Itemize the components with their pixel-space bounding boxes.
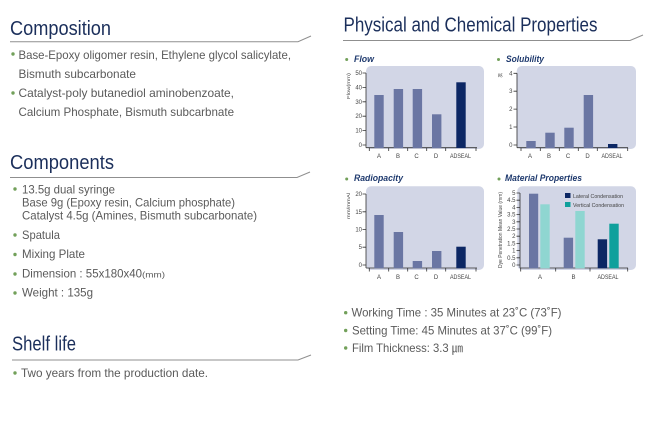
working, setting and film properties: Working Time : 35 Minutes at 23˚C (73˚F) — [352, 306, 562, 320]
chart: radiopacity: ADSEAL — [450, 275, 472, 281]
composition list: Calcium Phosphate, Bismuth subcarbnate — [18, 105, 234, 119]
chart: material properties: 0.5 — [507, 256, 516, 262]
components list: (mm) — [142, 270, 165, 279]
chart: material properties: A — [538, 275, 542, 281]
chart: flow: 30 — [355, 100, 363, 106]
chart: solubility — [497, 54, 636, 160]
components list: Mixing Plate — [22, 247, 85, 261]
legend — [565, 193, 624, 209]
chart: solubility: C — [566, 154, 571, 160]
chart: solubility: 3 — [509, 89, 513, 95]
chart: solubility: 1 — [509, 125, 513, 131]
chart: flow: 50 — [355, 71, 363, 77]
chart: material properties: 2.5 — [507, 227, 516, 233]
chart: radiopacity: mm/mmAl — [346, 193, 351, 219]
composition list: Base-Epoxy oligomer resin, Ethylene glycol salicylate, — [18, 48, 291, 62]
chart: flow: 0 — [359, 143, 363, 149]
chart: flow — [345, 54, 484, 160]
legend: Vertical Condensation — [573, 203, 624, 209]
chart: solubility: ADSEAL — [602, 154, 623, 160]
chart: solubility: ㎍ — [498, 72, 503, 79]
chart: flow: 40 — [355, 85, 363, 91]
panel: components — [10, 152, 310, 300]
chart: radiopacity: B — [396, 275, 400, 281]
chart: radiopacity — [345, 173, 484, 281]
chart: material properties: 4.5 — [507, 198, 516, 204]
working, setting and film properties: Film Thickness: 3.3 ㎛ — [352, 341, 463, 355]
chart: flow: 10 — [355, 129, 363, 135]
components list: 13.5g dual syringe — [22, 182, 115, 196]
heading: physical and chemical properties: Physical and Chemical Properties — [344, 15, 598, 37]
chart: flow: A — [377, 154, 381, 160]
chart: material properties: 2 — [512, 234, 516, 240]
chart: material properties: 1.5 — [507, 241, 516, 247]
chart: material properties: 1 — [512, 249, 516, 255]
chart: material properties — [498, 173, 636, 281]
chart: flow: ADSEAL — [450, 154, 472, 160]
components list: Spatula — [22, 228, 60, 242]
chart: flow: Flow(mm) — [346, 72, 351, 99]
chart: solubility: 2 — [509, 107, 513, 113]
chart: radiopacity: 5 — [359, 245, 363, 251]
heading: composition: Composition — [10, 18, 111, 40]
chart: material properties: 3 — [512, 220, 516, 226]
legend: Lateral Condensation — [573, 194, 623, 200]
heading: components: Components — [10, 152, 114, 174]
chart: radiopacity: 20 — [355, 192, 363, 198]
chart: radiopacity: 10 — [355, 228, 363, 234]
working, setting and film properties: Setting Time: 45 Minutes at 37˚C (99˚F) — [352, 324, 552, 338]
components list: Catalyst 4.5g (Amines, Bismuth subcarbonate) — [22, 209, 257, 223]
chart: solubility: 4 — [509, 71, 513, 77]
chart: solubility: 0 — [509, 143, 513, 149]
chart: solubility: A — [528, 154, 532, 160]
chart: radiopacity: D — [434, 275, 439, 281]
components list: Dimension : 55x180x40 — [22, 266, 142, 280]
chart: radiopacity: 0 — [359, 263, 363, 269]
chart: flow: C — [414, 154, 419, 160]
working, setting and film properties — [344, 306, 562, 355]
chart: solubility: B — [547, 154, 551, 160]
chart: material properties: Dye Penetration Mean Value (mm) — [498, 192, 504, 268]
chart: radiopacity: C — [414, 275, 419, 281]
chart: flow: D — [434, 154, 439, 160]
chart: material properties: B — [571, 275, 576, 281]
chart: material properties: Material Properties — [505, 173, 582, 183]
components list: Weight : 135g — [22, 286, 93, 300]
panel: composition — [10, 18, 311, 119]
chart: flow: Flow — [354, 54, 375, 64]
chart: solubility: Solubility — [506, 54, 545, 64]
composition list: Catalyst-poly butanediol aminobenzoate, — [18, 86, 234, 100]
chart: material properties: 4 — [512, 205, 516, 211]
composition list: Bismuth subcarbonate — [18, 67, 136, 81]
chart: radiopacity: 15 — [355, 210, 363, 216]
chart: material properties: 0 — [512, 263, 516, 269]
components list: Base 9g (Epoxy resin, Calcium phosphate) — [22, 196, 235, 210]
shelf life item: Two years from the production date. — [21, 366, 208, 380]
components list — [13, 182, 257, 300]
composition list — [11, 48, 291, 119]
chart: material properties: ADSEAL — [598, 275, 619, 281]
chart: flow: B — [396, 154, 400, 160]
chart: radiopacity: Radiopacity — [354, 173, 404, 183]
chart: radiopacity: A — [377, 275, 381, 281]
chart: material properties: 3.5 — [507, 213, 516, 219]
panel: shelf life — [12, 334, 311, 380]
chart: material properties: 5 — [512, 191, 516, 197]
heading: shelf life: Shelf life — [12, 334, 76, 356]
chart: solubility: D — [585, 154, 590, 160]
chart: flow: 20 — [355, 114, 363, 120]
